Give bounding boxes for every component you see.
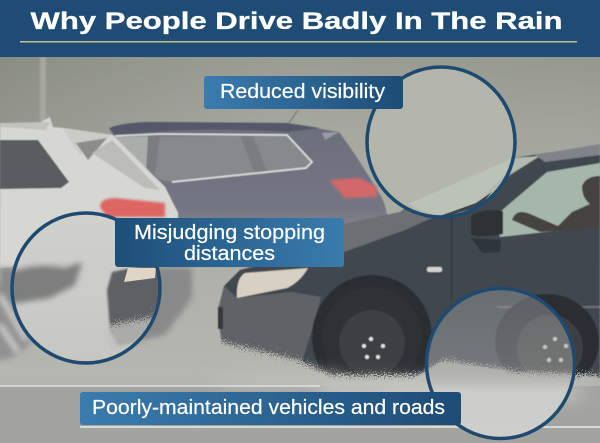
car: left car lower parts in haze [0, 265, 192, 360]
front bumper [218, 286, 321, 368]
label: poorly-maintained vehicles and roads: Poorly-maintained vehicles and roads [92, 397, 445, 419]
street pole [40, 57, 46, 127]
title underline [20, 41, 577, 42]
label: misjudging stopping distances: Misjudging stopping [134, 222, 325, 244]
road spray [210, 373, 585, 404]
driver silhouette [512, 176, 600, 232]
car: dark gray foreground car [218, 144, 600, 399]
windshield [413, 156, 540, 213]
hood [300, 205, 443, 256]
headlight [237, 268, 308, 298]
label: misjudging stopping distances [115, 218, 344, 267]
rear wheel [495, 294, 599, 390]
roof [535, 144, 600, 162]
front wheel [322, 287, 422, 387]
label: reduced visibility [204, 76, 403, 109]
circle highlight: visibility haze [367, 67, 515, 217]
car: white left car [0, 117, 178, 268]
title: Why People Drive Badly In The Rain [30, 8, 562, 35]
front wheel arch [312, 275, 432, 399]
circle highlight: stopping distance haze [10, 212, 162, 364]
header band [0, 0, 600, 57]
side window [494, 163, 600, 237]
label: reduced visibility: Reduced visibility [220, 81, 385, 103]
car: blue-gray rear car [109, 110, 392, 268]
road surface [0, 386, 600, 443]
door line and marker lamp [451, 215, 452, 300]
road line markings [0, 385, 600, 428]
side mirror [471, 210, 503, 236]
circle highlight: road and vehicle spray [426, 288, 576, 440]
grainy spray fringe under car [214, 330, 600, 396]
label: poorly-maintained vehicles and roads [80, 392, 461, 425]
label: misjudging stopping distances: distances [184, 243, 275, 265]
